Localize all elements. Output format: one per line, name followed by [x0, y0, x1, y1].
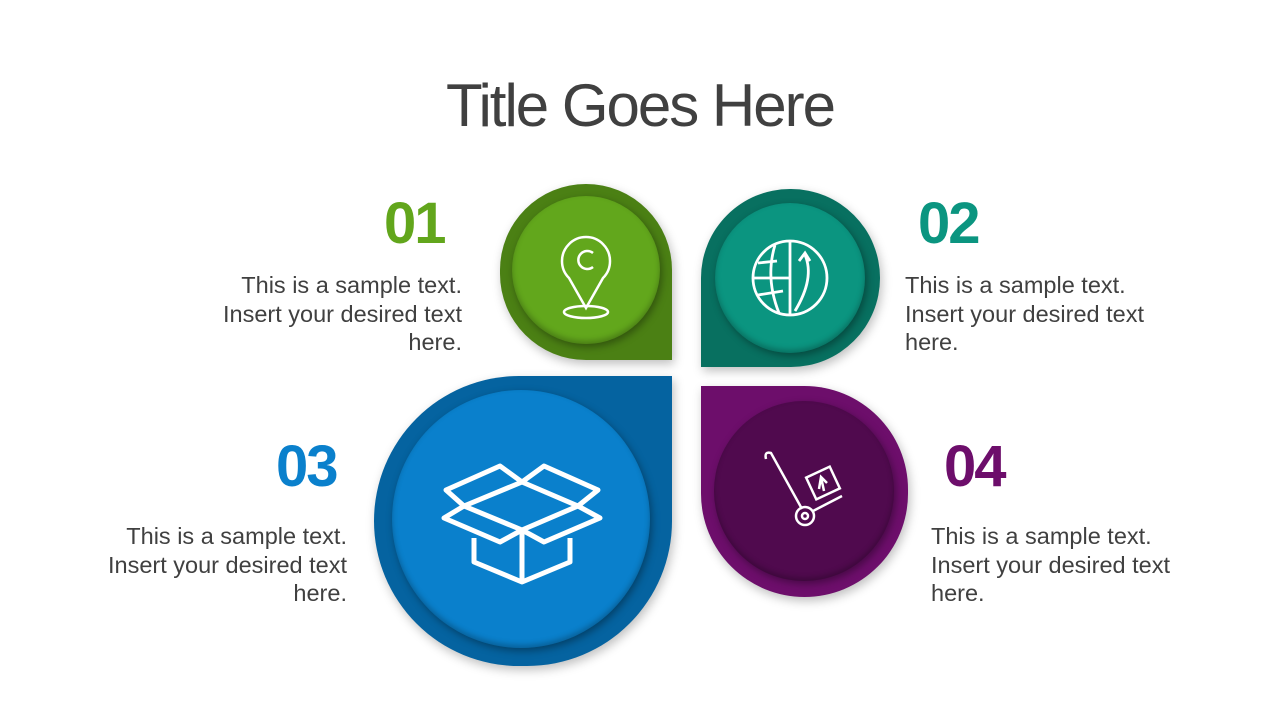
text 03	[108, 523, 347, 606]
text 04: Insert your desired text	[931, 552, 1170, 578]
text 02: Insert your desired text	[905, 300, 1144, 326]
text 02: This is a sample text.	[905, 272, 1126, 298]
text 03: Insert your desired text	[108, 552, 347, 578]
title: Title Goes Here	[446, 72, 834, 139]
panel: 03 blue drop	[374, 376, 672, 666]
text 04	[931, 523, 1170, 606]
icon: hand truck	[764, 451, 842, 526]
inner circle purple	[714, 401, 894, 581]
inner circle green	[512, 196, 660, 344]
text 02: here.	[905, 329, 959, 355]
icon: open box	[442, 464, 602, 584]
text 01	[223, 272, 462, 355]
text 03: This is a sample text.	[126, 523, 347, 549]
text 01: here.	[408, 329, 462, 355]
number 03: 03	[276, 434, 337, 499]
text 04: here.	[931, 580, 985, 606]
inner circle teal	[715, 203, 865, 353]
panel: 01 green drop	[500, 184, 672, 360]
number 04: 04	[944, 434, 1005, 499]
text 02	[905, 272, 1144, 355]
panel: 04 purple drop	[701, 386, 908, 597]
panel: 02 teal drop	[701, 189, 880, 367]
text 03: here.	[293, 580, 347, 606]
icon: location pin	[560, 236, 612, 320]
icon: globe	[752, 240, 828, 316]
inner circle blue	[392, 390, 650, 648]
text 01: This is a sample text.	[241, 272, 462, 298]
text 01: Insert your desired text	[223, 300, 462, 326]
number 01: 01	[384, 191, 445, 256]
text 04: This is a sample text.	[931, 523, 1152, 549]
number 02: 02	[918, 191, 979, 256]
